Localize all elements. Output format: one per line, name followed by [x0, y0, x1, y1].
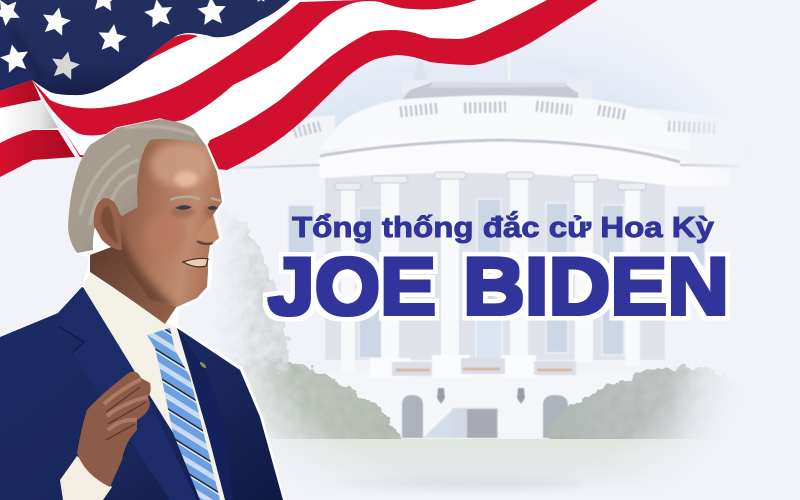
face shading	[115, 143, 220, 308]
canton fold	[0, 76, 36, 91]
head and face	[115, 130, 222, 307]
curved cornice	[230, 137, 740, 186]
American flag	[0, 0, 598, 177]
mouth	[183, 258, 208, 267]
Joe Biden portrait	[0, 119, 284, 500]
lapel pin	[200, 362, 206, 368]
white cutout outline	[0, 119, 284, 499]
inner ear	[101, 206, 118, 244]
name heading: JOE	[268, 242, 436, 332]
suit	[0, 287, 283, 500]
shirt	[83, 273, 227, 500]
white stripe two	[47, 0, 547, 160]
blue canton	[0, 0, 290, 95]
name heading: BIDEN	[463, 242, 729, 332]
left lapel	[58, 287, 197, 500]
lawn	[274, 439, 687, 480]
eyes	[175, 205, 218, 210]
sky	[306, 46, 691, 129]
stars	[0, 0, 267, 81]
lapel shadow	[60, 327, 84, 353]
side wings roofline	[278, 108, 719, 140]
nostril shadow	[197, 241, 213, 244]
fold stripes	[0, 80, 41, 108]
tie	[147, 328, 220, 500]
hair	[68, 119, 207, 253]
hand and cuff	[60, 372, 151, 500]
right lapel	[177, 328, 233, 500]
brows	[170, 197, 221, 201]
hair strands	[80, 126, 195, 225]
bushes	[244, 355, 720, 439]
roof	[402, 55, 592, 101]
building and details	[225, 55, 745, 440]
red base	[32, 0, 598, 170]
White House photo backdrop	[226, 46, 738, 492]
windows	[288, 199, 705, 364]
nose	[195, 216, 219, 244]
bottom fog	[250, 485, 800, 500]
trees at left	[226, 218, 292, 372]
column capitals	[335, 172, 646, 190]
name heading	[268, 242, 729, 332]
subtitle: Tổng thống đắc cử Hoa Kỳ	[292, 212, 714, 244]
building body	[335, 144, 640, 152]
white stripe one	[32, 0, 360, 108]
balustrade	[282, 95, 716, 140]
lawn shadow	[375, 478, 566, 490]
small red stripe	[143, 34, 198, 63]
portico interior	[325, 173, 665, 360]
right side fog	[730, 140, 800, 500]
columns	[341, 176, 640, 375]
ear	[94, 198, 122, 250]
ground floor and balcony	[370, 354, 576, 376]
arches and door	[402, 388, 568, 438]
neck	[90, 247, 176, 324]
